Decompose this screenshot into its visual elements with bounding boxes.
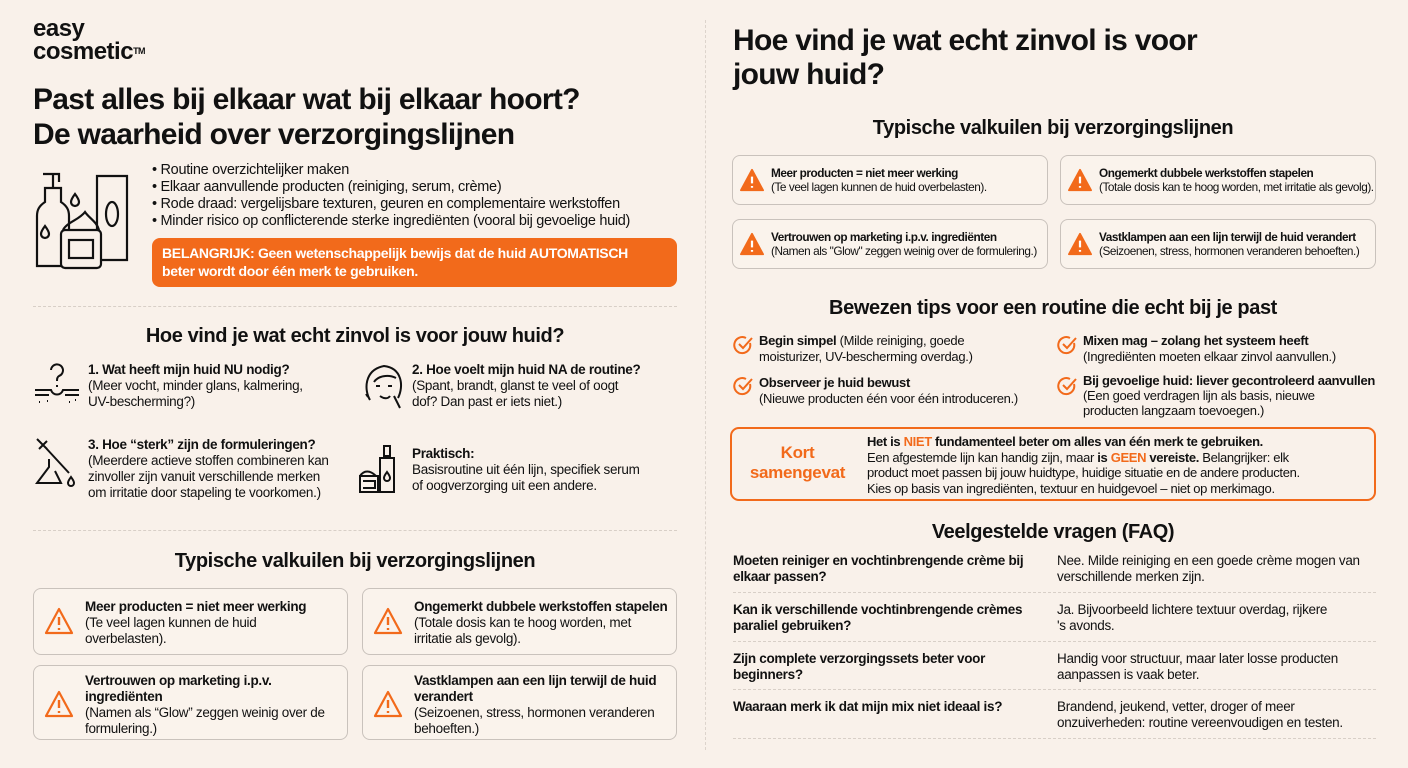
panel: pitfalls right: Vertrouwen op marketing i.p.v. ingrediënten xyxy=(771,230,997,244)
panel: FAQ: verschillende merken zijn. xyxy=(1057,569,1205,584)
panel: tips: (Nieuwe producten één voor één introduceren.) xyxy=(759,391,1018,406)
panel: pitfalls right: Vastklampen aan een lijn terwijl de huid verandert xyxy=(1099,230,1356,244)
heading: bewezen tips: Bewezen tips voor een routine die echt bij je past xyxy=(829,297,1277,319)
panel: pitfalls left: (Seizoenen, stress, hormonen veranderen xyxy=(414,705,654,720)
heading: valkuilen left: Typische valkuilen bij verzorgingslijnen xyxy=(175,550,535,572)
main title: Past alles bij elkaar wat bij elkaar hoort? xyxy=(33,83,580,116)
text: question 3: (Meerdere actieve stoffen combineren kan xyxy=(88,453,329,468)
text: question 3 xyxy=(88,437,329,500)
callout: kort samengevat: Kies op basis van ingrediënten, textuur en huidgevoel – niet op merkimago. xyxy=(867,480,1275,496)
panel: FAQ: Ja. Bijvoorbeeld lichtere textuur overdag, rijkere xyxy=(1057,602,1327,617)
panel: FAQ: Waaraan merk ik dat mijn mix niet ideaal is? xyxy=(733,699,1002,714)
bullet list: • Routine overzichtelijker maken xyxy=(152,162,349,178)
text: question 2: (Spant, brandt, glanst te veel of oogt xyxy=(412,378,618,393)
panel: FAQ: onzuiverheden: routine vereenvoudigen en testen. xyxy=(1057,715,1343,730)
callout: belangrijk: beter wordt door één merk te gebruiken. xyxy=(162,263,418,279)
panel: tips: Begin simpel (Milde reiniging, goede xyxy=(759,333,964,348)
panel: FAQ xyxy=(733,553,1376,739)
panel: pitfalls right: Meer producten = niet meer werking xyxy=(771,166,958,180)
panel: pitfalls left: (Te veel lagen kunnen de huid xyxy=(85,615,256,630)
panel: pitfalls left: Vertrouwen op marketing i.p.v. xyxy=(85,673,272,688)
text: question 3: 3. Hoe “sterk” zijn de formuleringen? xyxy=(88,437,315,452)
panel: FAQ: Handig voor structuur, maar later losse producten xyxy=(1057,651,1338,666)
text: question 3: om irritatie door stapeling te voorkomen.) xyxy=(88,485,321,500)
panel: tips: Mixen mag – zolang het systeem heeft xyxy=(1083,333,1308,348)
panel: pitfalls right: (Namen als "Glow" zeggen weinig over de formulering.) xyxy=(771,244,1037,258)
panel: pitfalls right: Ongemerkt dubbele werkstoffen stapelen xyxy=(1099,166,1313,180)
text: question 2 xyxy=(412,362,640,409)
panel: tips: (Een goed verdragen lijn als basis, nieuwe xyxy=(1083,388,1315,403)
panel: FAQ: beginners? xyxy=(733,667,803,682)
text: question 3: zinvoller zijn vanuit verschillende merken xyxy=(88,469,320,484)
panel: tips: producten langzaam toevoegen.) xyxy=(1083,403,1264,418)
bullet list xyxy=(152,162,630,229)
callout: kort samengevat: product moet passen bij jouw huidtype, huidige situatie en de andere producten. xyxy=(867,465,1300,480)
panel: pitfalls right: (Te veel lagen kunnen de huid overbelasten). xyxy=(771,180,987,194)
panel: pitfalls left: behoeften.) xyxy=(414,721,479,736)
icon: bottles xyxy=(36,172,128,270)
callout: kort samengevat: Kort xyxy=(781,443,814,462)
panel: FAQ: paraliel gebruiken? xyxy=(733,618,851,633)
panel: pitfalls left: Ongemerkt dubbele werkstoffen stapelen xyxy=(414,599,667,614)
panel: pitfalls left xyxy=(33,588,677,740)
panel: pitfalls left: Vastklampen aan een lijn terwijl de huid xyxy=(414,673,656,688)
text: question 2: dof? Dan past er iets niet.) xyxy=(412,394,562,409)
panel: questions xyxy=(35,362,640,500)
text: praktisch: Basisroutine uit één lijn, specifiek serum xyxy=(412,462,640,477)
panel: pitfalls left: formulering.) xyxy=(85,721,157,736)
panel: FAQ: Brandend, jeukend, vetter, droger of meer xyxy=(1057,699,1295,714)
icon: dropper flask xyxy=(35,438,75,487)
panel: pitfalls right: (Totale dosis kan te hoog worden, met irritatie als gevolg). xyxy=(1099,180,1374,194)
panel: tips: Observeer je huid bewust xyxy=(759,375,910,390)
panel: pitfalls left: overbelasten). xyxy=(85,631,166,646)
text: praktisch xyxy=(412,446,640,493)
panel: pitfalls right xyxy=(732,155,1376,269)
logo xyxy=(33,15,145,65)
panel: pitfalls left: verandert xyxy=(414,689,473,704)
right title xyxy=(732,24,1198,91)
text: question 1 xyxy=(88,362,303,409)
panel: FAQ: Moeten reiniger en vochtinbrengende crème bij xyxy=(733,553,1023,568)
icon: serum and jar xyxy=(359,445,395,493)
right title: Hoe vind je wat echt zinvol is voor xyxy=(733,24,1197,57)
panel: tips: (Ingrediënten moeten elkaar zinvol aanvullen.) xyxy=(1083,349,1336,364)
panel: tips xyxy=(733,333,1375,418)
logo: cosmeticTM xyxy=(33,38,145,65)
panel: FAQ: Zijn complete verzorgingssets beter voor xyxy=(733,651,985,666)
text: question 1: UV-bescherming?) xyxy=(88,394,195,409)
callout: belangrijk: BELANGRIJK: Geen wetenschappelijk bewijs dat de huid AUTOMATISCH xyxy=(162,245,628,261)
panel: tips: moisturizer, UV-bescherming overdag.) xyxy=(759,349,973,364)
icon: face xyxy=(365,365,402,408)
heading: FAQ: Veelgestelde vragen (FAQ) xyxy=(932,521,1174,543)
text: praktisch: Praktisch: xyxy=(412,446,474,461)
callout: kort samengevat: Het is NIET fundamenteel beter om alles van één merk te gebruiken. xyxy=(867,434,1263,449)
panel: pitfalls left: (Namen als “Glow” zeggen weinig over de xyxy=(85,705,325,720)
panel: FAQ: 's avonds. xyxy=(1057,618,1114,633)
bullet list: • Elkaar aanvullende producten (reiniging, serum, crème) xyxy=(152,179,501,195)
panel: pitfalls left: ingrediënten xyxy=(85,689,162,704)
heading: valkuilen right: Typische valkuilen bij verzorgingslijnen xyxy=(873,117,1233,139)
right title: jouw huid? xyxy=(733,58,884,91)
panel: FAQ: Kan ik verschillende vochtinbrengende crèmes xyxy=(733,602,1022,617)
panel: FAQ: aanpassen is vaak beter. xyxy=(1057,667,1199,682)
main title xyxy=(33,83,580,151)
panel: FAQ: elkaar passen? xyxy=(733,569,826,584)
panel: pitfalls left: (Totale dosis kan te hoog worden, met xyxy=(414,615,631,630)
icon: skin question xyxy=(35,363,79,403)
logo: easy xyxy=(33,15,84,42)
text: question 1: (Meer vocht, minder glans, kalmering, xyxy=(88,378,303,393)
text: question 1: 1. Wat heeft mijn huid NU nodig? xyxy=(88,362,289,377)
bullet list: • Rode draad: vergelijsbare texturen, geuren en complementaire werkstoffen xyxy=(152,196,620,212)
panel: pitfalls left: Meer producten = niet meer werking xyxy=(85,599,306,614)
main title: De waarheid over verzorgingslijnen xyxy=(33,118,514,151)
panel: FAQ: Nee. Milde reiniging en een goede crème mogen van xyxy=(1057,553,1360,568)
callout: kort samengevat xyxy=(730,427,1376,501)
panel: tips: Bij gevoelige huid: liever gecontroleerd aanvullen xyxy=(1083,373,1375,388)
callout: belangrijk xyxy=(152,238,677,287)
panel: pitfalls right: (Seizoenen, stress, hormonen veranderen behoeften.) xyxy=(1099,244,1359,258)
heading: hoe vind je: Hoe vind je wat echt zinvol is voor jouw huid? xyxy=(146,325,564,347)
bullet list: • Minder risico op conflicterende sterke ingrediënten (vooral bij gevoelige huid) xyxy=(152,213,630,229)
callout: kort samengevat: Een afgestemde lijn kan handig zijn, maar is GEEN vereiste. Belangrijker: elk xyxy=(867,450,1289,464)
callout: kort samengevat: samengevat xyxy=(750,463,845,482)
text: praktisch: of oogverzorging uit een andere. xyxy=(412,478,597,493)
text: question 2: 2. Hoe voelt mijn huid NA de routine? xyxy=(412,362,640,377)
panel: pitfalls left: irritatie als gevolg). xyxy=(414,631,521,646)
